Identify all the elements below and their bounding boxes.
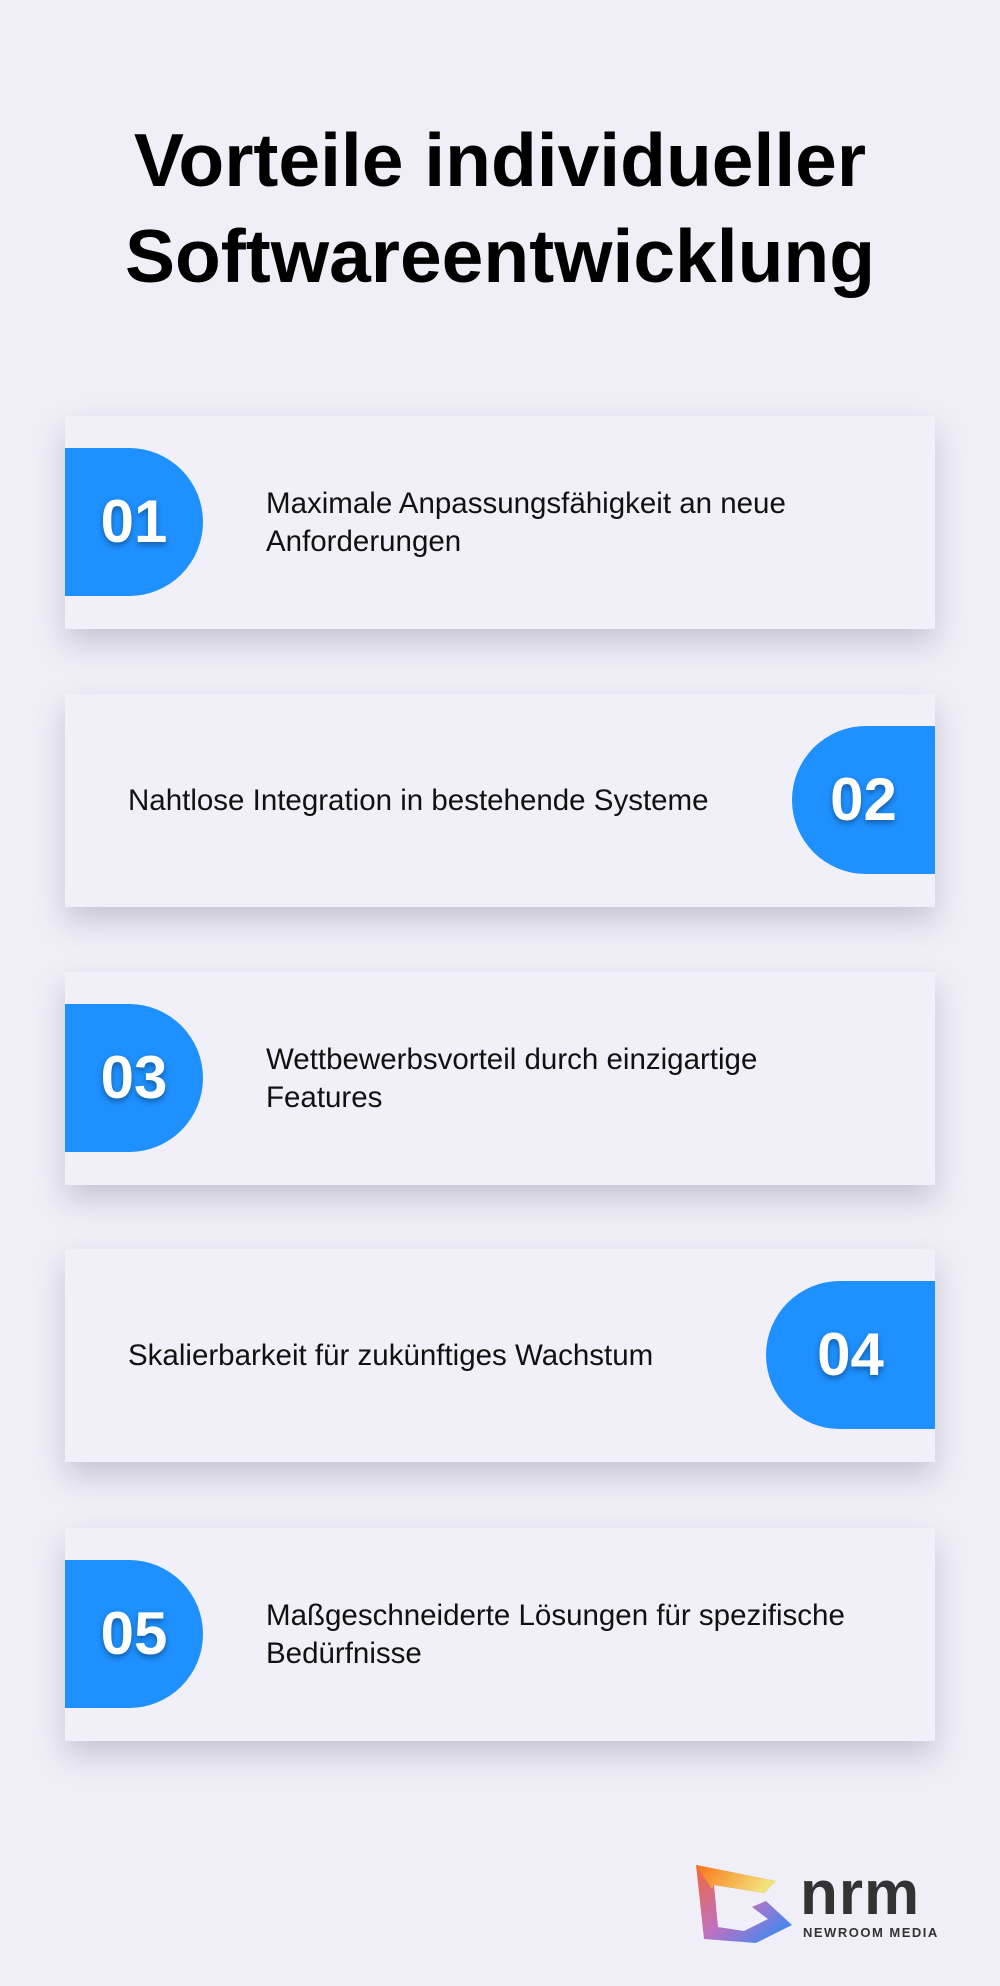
- title: [125, 118, 875, 298]
- badge 04: [766, 1281, 935, 1429]
- logo text: nrm: [800, 1859, 920, 1928]
- card 4: [65, 1249, 935, 1462]
- text 5: Bedürfnisse: [266, 1636, 422, 1670]
- badge 04: 04: [817, 1321, 884, 1388]
- text 5: Maßgeschneiderte Lösungen für spezifische: [266, 1598, 845, 1632]
- badge 05: 05: [101, 1600, 167, 1667]
- logo: NEWROOM MEDIA: [803, 1925, 939, 1940]
- badge 03: 03: [101, 1044, 167, 1111]
- card 1: [65, 416, 935, 629]
- card 3: [65, 972, 935, 1185]
- text 1: Anforderungen: [266, 524, 461, 558]
- badge 01: [65, 448, 203, 596]
- text 2: Nahtlose Integration in bestehende Systeme: [128, 784, 709, 816]
- title: Softwareentwicklung: [125, 214, 875, 298]
- badge 02: 02: [830, 766, 897, 833]
- text 1: [266, 486, 786, 558]
- title: Vorteile individueller: [134, 118, 866, 202]
- text 3: Wettbewerbsvorteil durch einzigartige: [266, 1042, 757, 1076]
- card 2: [65, 694, 935, 907]
- icon: logo mark: [696, 1865, 792, 1943]
- text 5: [266, 1598, 845, 1670]
- badge 05: [65, 1560, 203, 1708]
- badge 02: [792, 726, 935, 874]
- text 1: Maximale Anpassungsfähigkeit an neue: [266, 486, 786, 520]
- text 4: Skalierbarkeit für zukünftiges Wachstum: [128, 1338, 653, 1372]
- badge 03: [65, 1004, 203, 1152]
- logo: [696, 1859, 939, 1943]
- card 5: [65, 1528, 935, 1741]
- text 3: [266, 1042, 757, 1114]
- text 3: Features: [266, 1080, 382, 1114]
- badge 01: 01: [101, 488, 167, 555]
